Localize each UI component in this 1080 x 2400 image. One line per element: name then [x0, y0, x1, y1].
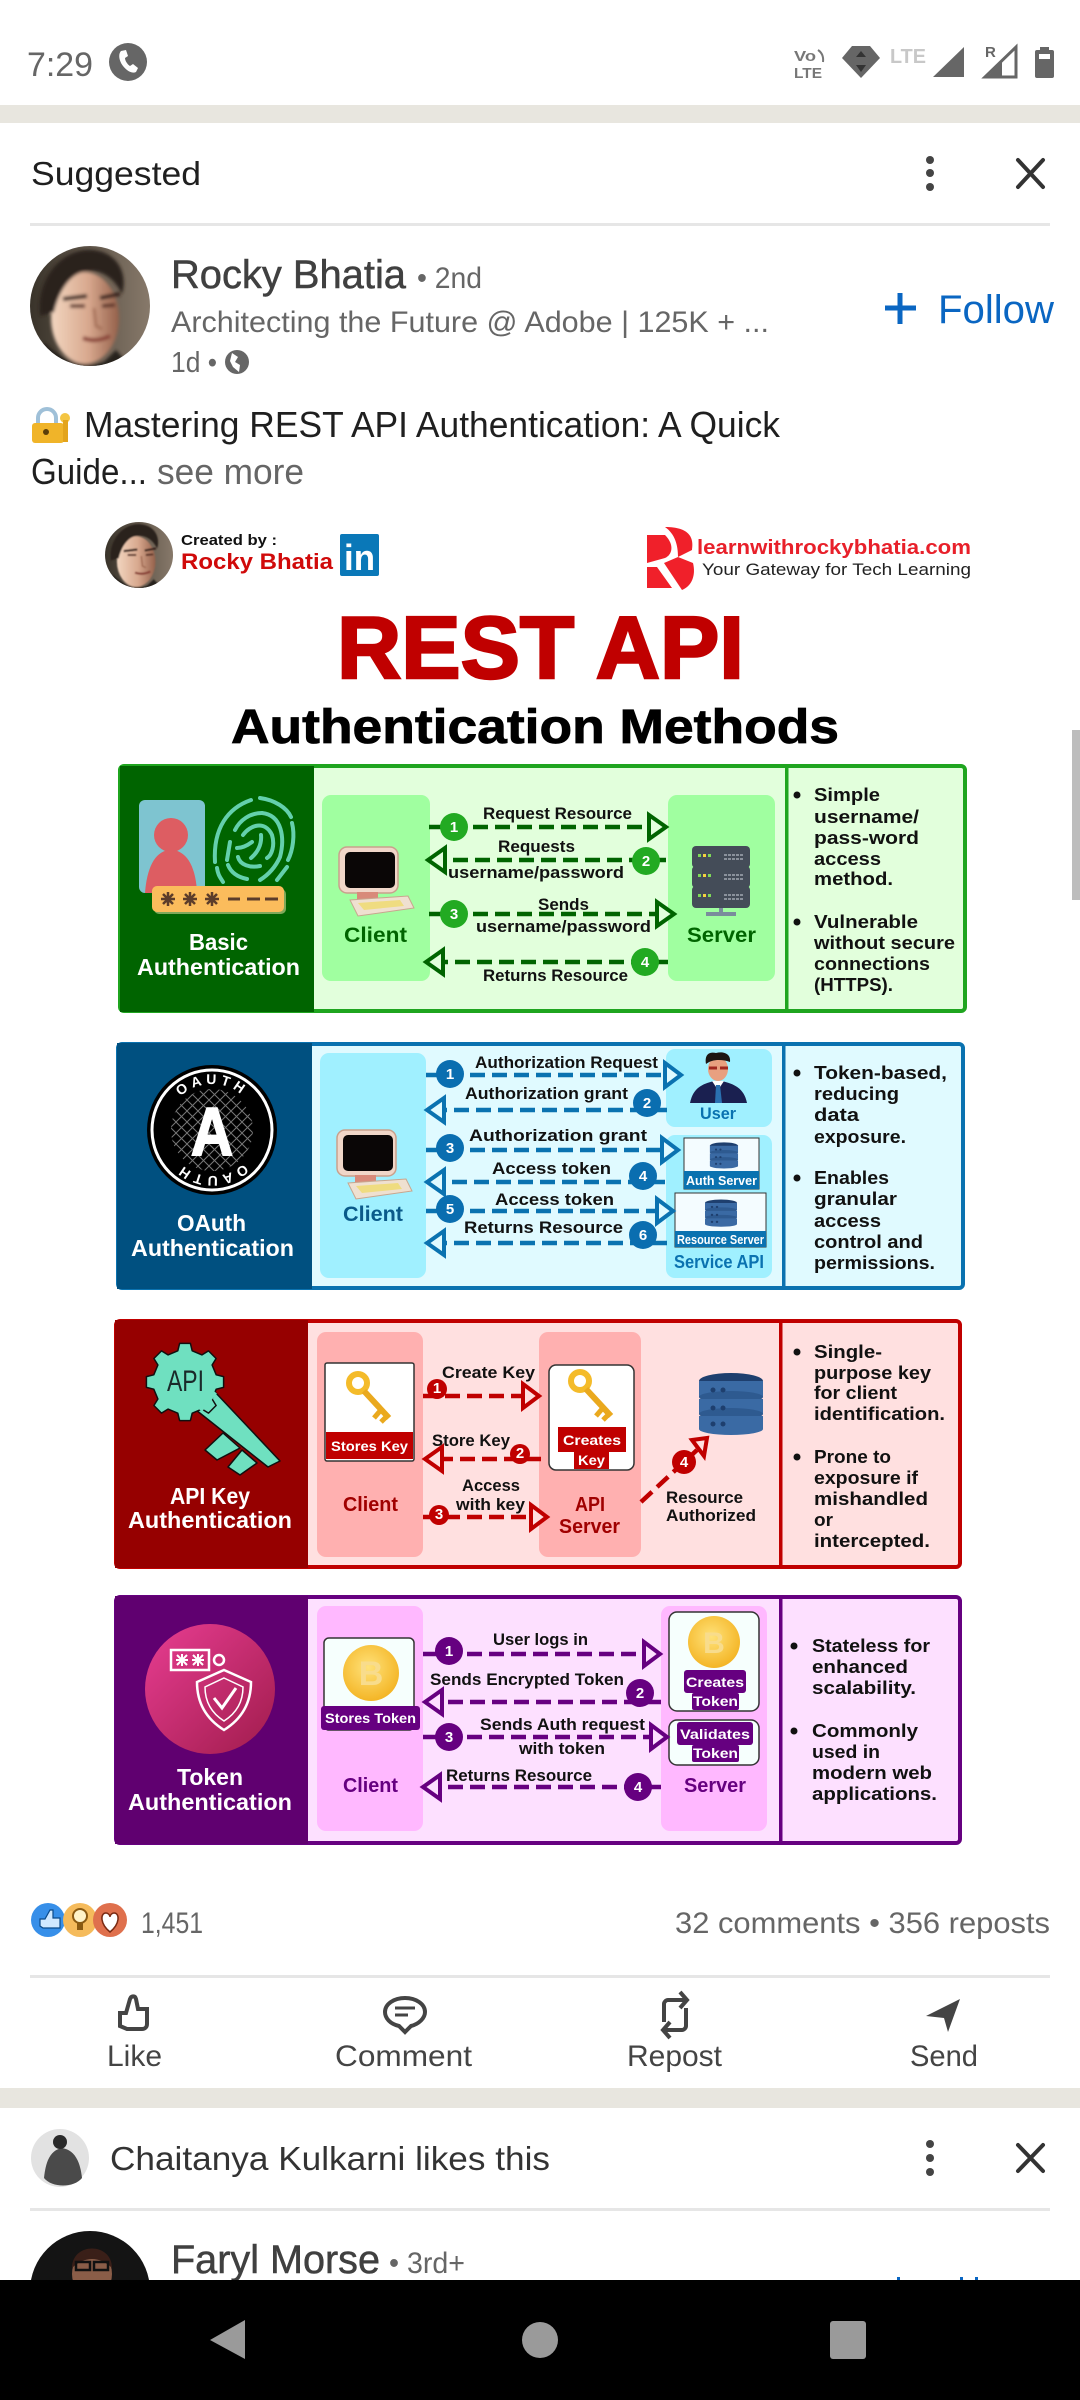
- creates key card: Key: [578, 1452, 605, 1468]
- divider band: [0, 2088, 1080, 2108]
- bullets: token: modern web: [812, 1763, 932, 1783]
- status bar: [27, 43, 1054, 84]
- follow button top edge: [897, 2277, 978, 2281]
- step badges: 3: [445, 1729, 453, 1746]
- bullets: token: used in: [812, 1742, 880, 1762]
- created by label: Created by :: [181, 532, 277, 549]
- client label: Client: [343, 1494, 398, 1516]
- panel: token authentication: [115, 1596, 960, 1844]
- step badges: 2: [642, 853, 650, 870]
- stores key card: [325, 1363, 414, 1461]
- caption line 2: Guide...: [31, 451, 147, 492]
- subtitle: Authentication Methods: [231, 701, 839, 754]
- bullets: api key: exposure if: [814, 1468, 919, 1488]
- step badges: [435, 1637, 654, 1801]
- icon: server rack: [692, 846, 750, 914]
- bullets: api key: identification.: [814, 1404, 945, 1424]
- flow labels: [430, 1630, 645, 1785]
- service api label: Service API: [674, 1252, 764, 1272]
- flow labels: Request Resource: [483, 804, 632, 823]
- arrow 1: [423, 1384, 539, 1408]
- step badges: 4: [680, 1454, 689, 1471]
- navigation bar: [0, 2280, 1080, 2400]
- step badges: 6: [639, 1227, 647, 1244]
- icon: wifi diamond: [842, 46, 880, 78]
- creates key card: Creates: [563, 1432, 621, 1448]
- flow labels: with key: [455, 1495, 526, 1514]
- arrow 5: [426, 1199, 673, 1223]
- post caption: [31, 404, 781, 492]
- flow labels: username/password: [448, 863, 624, 882]
- title REST API: REST API: [337, 598, 744, 697]
- step badges: 4: [641, 954, 650, 971]
- step badges: 1: [450, 819, 458, 836]
- flow labels: [432, 1363, 756, 1525]
- basic title: [137, 929, 300, 980]
- creates token card: [669, 1612, 759, 1711]
- bullets: oauth: granular: [814, 1189, 897, 1209]
- icon: VoLTE: LTE: [794, 65, 822, 82]
- creates key card: [549, 1365, 634, 1470]
- stores token card: Stores Token: [325, 1710, 416, 1726]
- bullets: token: [790, 1636, 937, 1804]
- next author degree: • 3rd+: [389, 2247, 465, 2280]
- creator avatar: [105, 522, 173, 589]
- stores token card: [321, 1638, 420, 1730]
- token title: [128, 1764, 292, 1815]
- bullets: basic: method.: [814, 869, 893, 889]
- step badges: 1: [445, 1643, 453, 1660]
- icon: more menu: [926, 156, 934, 191]
- caption line 1: Mastering REST API Authentication: A Quick: [84, 404, 781, 445]
- bullets: api key: mishandled: [814, 1489, 928, 1509]
- arrow 2: [425, 1447, 541, 1471]
- repost action: Repost: [627, 2040, 723, 2073]
- next author avatar: [30, 2231, 150, 2351]
- arrow 2: [425, 1690, 661, 1714]
- icon: roaming signal: R: [985, 44, 996, 61]
- flow labels: Returns Resource: [464, 1218, 623, 1237]
- server column: [668, 795, 775, 981]
- arrow 3: [423, 1505, 547, 1529]
- flow labels: username/password: [476, 917, 651, 936]
- author headline: Architecting the Future @ Adobe | 125K + ...: [171, 306, 769, 339]
- step badges: 5: [446, 1201, 454, 1218]
- bullets: token: applications.: [812, 1784, 937, 1804]
- send action: Send: [910, 2040, 978, 2073]
- flow labels: Store Key: [432, 1431, 511, 1450]
- flow labels: Authorization grant: [465, 1084, 628, 1103]
- bullets: token: Commonly: [812, 1721, 918, 1741]
- arrow 4: [641, 1438, 707, 1502]
- post author: [30, 246, 1054, 379]
- step badges: 2: [643, 1095, 651, 1112]
- step badges: 3: [450, 906, 458, 923]
- panel: basic authentication: [120, 766, 965, 1012]
- basic title: Basic: [189, 929, 248, 955]
- bullets: basic: Simple: [814, 785, 880, 805]
- step badges: 3: [435, 1506, 443, 1523]
- next author name: Faryl Morse: [171, 2238, 380, 2282]
- arrow 1: [426, 1063, 681, 1087]
- nav recents: [830, 2321, 866, 2359]
- server label: Server: [684, 1775, 746, 1797]
- arrow 2: [427, 1098, 667, 1122]
- flow labels: Authorization Request: [475, 1053, 658, 1072]
- icon: close: [1018, 2145, 1043, 2171]
- flow arrows: [423, 1642, 667, 1799]
- comment action: Comment: [335, 2040, 473, 2073]
- reaction count: 1,451: [141, 1907, 203, 1940]
- bullets: oauth: permissions.: [814, 1253, 935, 1273]
- icon: globe: [225, 350, 249, 374]
- icon: more menu: [926, 2140, 934, 2176]
- client column: [317, 1332, 423, 1557]
- flow labels: with token: [518, 1739, 605, 1758]
- icon: computer: [339, 847, 414, 916]
- step badges: 4: [639, 1168, 648, 1185]
- social proof text: Chaitanya Kulkarni likes this: [110, 2140, 550, 2177]
- api key title: Authentication: [128, 1507, 292, 1533]
- icon: oauth badge: [147, 1065, 277, 1195]
- see more link: see more: [157, 451, 304, 492]
- validates token card: Token: [693, 1745, 738, 1761]
- icon: fingerprint: [215, 798, 293, 882]
- validates token card: Validates: [680, 1726, 750, 1742]
- flow labels: Access: [462, 1476, 520, 1495]
- arrow 3 credentials: [429, 902, 674, 926]
- icon: oauth badge: A: [191, 1094, 233, 1170]
- arrow 3: [423, 1725, 667, 1749]
- bullets: basic: Vulnerable: [814, 912, 918, 932]
- panel: oauth authentication: [116, 1042, 965, 1290]
- flow labels: Sends: [538, 895, 589, 914]
- icon: VoLTE: [794, 48, 823, 82]
- arrow 6: [427, 1231, 667, 1255]
- arrow 2 credentials request: [428, 848, 666, 872]
- flow arrows: [426, 815, 674, 974]
- icon: database: [699, 1373, 763, 1435]
- divider band: [0, 105, 1080, 123]
- bullets: oauth: Token-based,: [814, 1063, 947, 1083]
- nav home: [522, 2322, 558, 2358]
- server label: Server: [687, 924, 756, 947]
- client label: Client: [343, 1203, 403, 1226]
- next post author: [30, 2231, 978, 2351]
- icon: phone call: [109, 43, 147, 81]
- step badges: [427, 1379, 696, 1525]
- left: api key icon: [128, 1343, 292, 1533]
- bullets: token: Stateless for: [812, 1636, 930, 1656]
- token title: Token: [177, 1764, 243, 1790]
- flow labels: Access token: [495, 1190, 614, 1209]
- icon: LTE label: LTE: [890, 46, 926, 68]
- auth server card: Auth Server: [686, 1173, 757, 1188]
- api server label: API: [575, 1494, 605, 1516]
- validates token card: [669, 1720, 759, 1765]
- send action: [910, 1999, 978, 2073]
- icon: person card: [139, 800, 205, 893]
- bullets: basic: username/: [814, 807, 919, 827]
- token title: Authentication: [128, 1789, 292, 1815]
- bullets: basic: pass-word: [814, 828, 919, 848]
- client column: [322, 795, 430, 981]
- flow labels: Authorization grant: [469, 1126, 647, 1145]
- bullets: token: enhanced: [812, 1657, 908, 1677]
- arrow 1: [423, 1642, 660, 1666]
- arrow 4 resource: [426, 950, 668, 974]
- client label: Client: [344, 924, 407, 947]
- creates token card: Creates: [686, 1674, 744, 1690]
- flow labels: Returns Resource: [446, 1766, 592, 1785]
- arrow 4: [427, 1170, 665, 1194]
- like action: [107, 1996, 162, 2073]
- connection degree: • 2nd: [417, 262, 482, 295]
- icon: gear key: API: [167, 1365, 204, 1398]
- scrollbar: [1072, 730, 1080, 900]
- auth server card: [684, 1138, 759, 1189]
- client column: [317, 1606, 423, 1831]
- repost action: [627, 1992, 723, 2073]
- suggested header: [31, 155, 1043, 192]
- step badges: 4: [634, 1779, 643, 1796]
- flow labels: [448, 804, 651, 985]
- nav back: [210, 2320, 245, 2359]
- bullets: basic: access: [814, 849, 881, 869]
- creates token card: Token: [693, 1693, 738, 1709]
- bullets: oauth: control and: [814, 1232, 923, 1252]
- panel: api key authentication: [115, 1320, 960, 1568]
- engagement row: [31, 1903, 1050, 1940]
- left: oauth logo: [131, 1065, 294, 1261]
- bullets: oauth: exposure.: [814, 1127, 906, 1147]
- service api box: [666, 1135, 772, 1278]
- follow button: [885, 288, 1054, 332]
- user label: User: [700, 1104, 736, 1123]
- icon: VoLTE: Vo: [794, 48, 816, 65]
- icon: close: [1018, 160, 1043, 187]
- suggested label: Suggested: [31, 155, 201, 192]
- icon: signal: [933, 47, 964, 77]
- bullets: api key: for client: [814, 1383, 897, 1403]
- client column: [320, 1053, 426, 1278]
- api key title: API Key: [170, 1483, 250, 1509]
- clock: 7:29: [27, 46, 93, 84]
- logo R: [647, 527, 694, 590]
- api server label: [559, 1494, 620, 1538]
- bullets: basic: (HTTPS).: [814, 975, 893, 995]
- left: token icon: [128, 1624, 292, 1815]
- icon: oauth badge: OAUTH: [178, 1166, 248, 1186]
- resource server card: [675, 1193, 766, 1247]
- bullets: oauth: access: [814, 1211, 881, 1231]
- step badges: 2: [636, 1685, 644, 1702]
- icon: reactions: [31, 1903, 127, 1937]
- bullets: oauth: data: [814, 1105, 860, 1125]
- stores token card: B: [359, 1655, 383, 1693]
- action bar: [107, 1992, 978, 2073]
- bullets: oauth: [794, 1063, 947, 1273]
- api server label: Server: [559, 1516, 620, 1538]
- bullets: token: scalability.: [812, 1678, 916, 1698]
- creates token card: B: [703, 1627, 725, 1660]
- step badges: [440, 813, 660, 976]
- bullets: oauth: reducing: [814, 1084, 899, 1104]
- flow labels: Returns Resource: [483, 966, 628, 985]
- bullets: api key: purpose key: [814, 1363, 931, 1383]
- bullets: basic: without secure: [813, 933, 955, 953]
- icon: user figure: [690, 1052, 747, 1103]
- user box: [666, 1049, 772, 1127]
- infographic header: [105, 522, 971, 590]
- stores key card: Stores Key: [331, 1438, 408, 1454]
- flow labels: User logs in: [493, 1630, 588, 1649]
- site url: learnwithrockybhatia.com: [697, 537, 971, 559]
- oauth title: OAuth: [177, 1210, 246, 1236]
- client label: Client: [343, 1775, 398, 1797]
- step badges: 1: [446, 1066, 454, 1083]
- flow labels: Sends Encrypted Token: [430, 1670, 624, 1689]
- icon: roaming signal: [985, 44, 1016, 77]
- flow labels: Resource: [666, 1488, 743, 1507]
- icon: lock with key: [32, 409, 70, 443]
- arrow 4: [423, 1775, 661, 1799]
- step badges: [436, 1060, 661, 1249]
- post age: 1d •: [171, 347, 217, 379]
- api key title: [128, 1483, 292, 1533]
- flow arrows: [426, 1063, 681, 1255]
- bullets: basic: [794, 785, 955, 995]
- bullets: oauth: Enables: [814, 1168, 889, 1188]
- step badges: 2: [516, 1445, 524, 1462]
- resource server card: Resource Server: [677, 1232, 764, 1247]
- oauth title: Authentication: [131, 1235, 294, 1261]
- like action: Like: [107, 2040, 162, 2073]
- flow labels: Requests: [498, 837, 575, 856]
- bullets: api key: [794, 1342, 945, 1551]
- flow arrows: [423, 1384, 707, 1529]
- oauth title: [131, 1210, 294, 1261]
- small avatar: [31, 2129, 89, 2187]
- title: [231, 598, 839, 754]
- icon: token shield: [145, 1624, 275, 1754]
- icon: gear key: [146, 1343, 280, 1475]
- flow labels: Sends Auth request: [480, 1715, 645, 1734]
- creator name: Rocky Bhatia: [181, 549, 334, 574]
- follow button: Follow: [938, 288, 1054, 332]
- server column: [661, 1606, 767, 1831]
- bullets: api key: intercepted.: [814, 1531, 930, 1551]
- flow labels: Access token: [492, 1159, 611, 1178]
- author avatar: [30, 246, 150, 368]
- flow labels: Authorized: [666, 1506, 756, 1525]
- api server column: [539, 1332, 641, 1557]
- flow labels: [464, 1053, 658, 1237]
- comments and reposts: 32 comments • 356 reposts: [675, 1907, 1050, 1940]
- icon: password bar: [152, 886, 286, 914]
- arrow 3: [426, 1138, 678, 1162]
- flow labels: Create Key: [442, 1363, 536, 1382]
- step badges: 3: [446, 1140, 454, 1157]
- bullets: basic: connections: [814, 954, 930, 974]
- arrow 1 request: [429, 815, 666, 839]
- step badges: 1: [433, 1380, 441, 1397]
- bullets: api key: Prone to: [814, 1447, 891, 1467]
- comment action: [335, 1998, 473, 2073]
- icon: computer: [337, 1130, 412, 1199]
- icon: battery: [1035, 47, 1054, 78]
- bullets: api key: Single-: [814, 1342, 882, 1362]
- site tagline: Your Gateway for Tech Learning: [702, 560, 971, 579]
- next post header: [31, 2129, 1043, 2187]
- left: basic icon: [137, 798, 300, 980]
- icon: linkedin: in: [344, 537, 375, 578]
- icon: oauth badge: OAUTH: [176, 1074, 246, 1094]
- basic title: Authentication: [137, 954, 300, 980]
- author name: Rocky Bhatia: [171, 253, 407, 297]
- bullets: api key: or: [814, 1510, 833, 1530]
